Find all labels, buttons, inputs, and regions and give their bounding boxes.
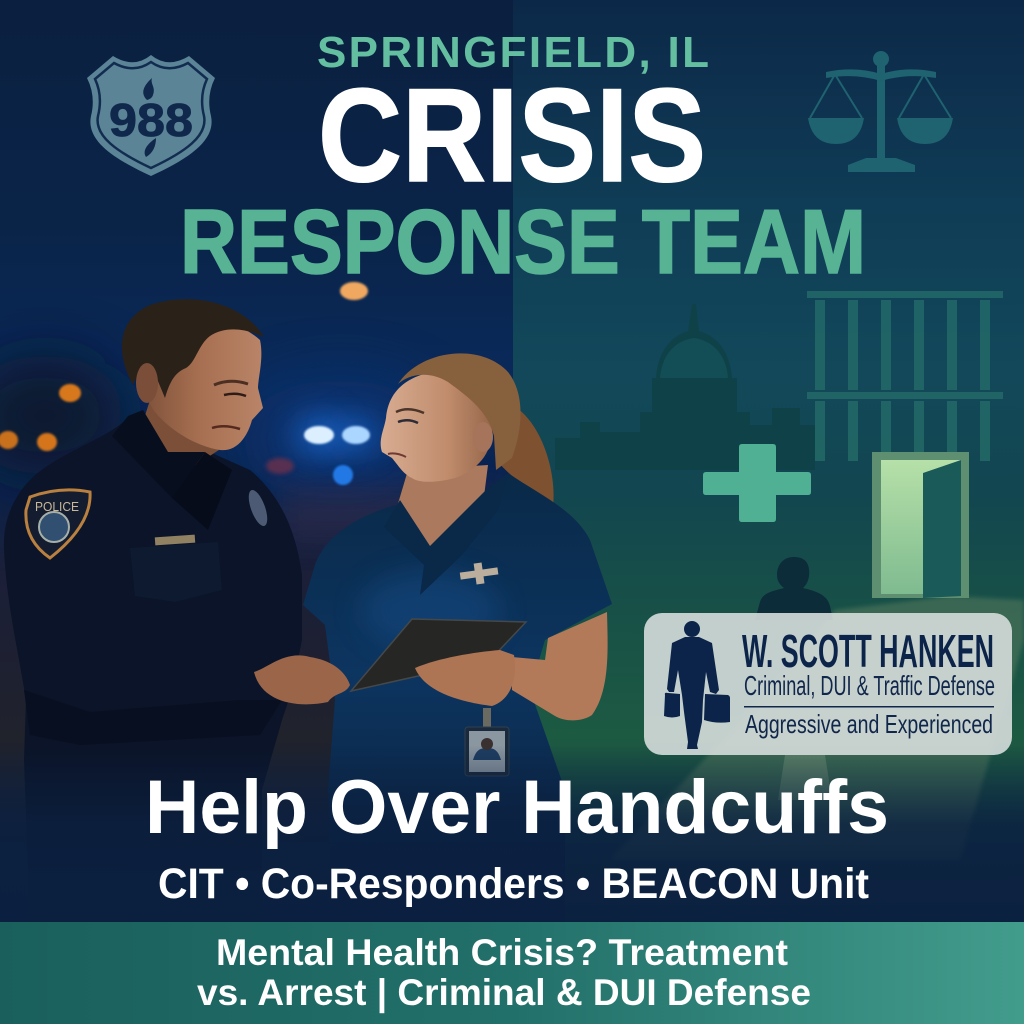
officer head (139, 314, 263, 450)
icon: 988 shield (87, 55, 215, 176)
shoulder patch: POLICE (35, 499, 79, 514)
icon: lawyer with briefcases (664, 621, 730, 749)
ponytail (498, 405, 554, 507)
officer brow, eye and mouth (212, 381, 248, 429)
officer body (4, 418, 302, 922)
face (381, 372, 492, 482)
fade under headline (0, 745, 1024, 922)
hair (398, 353, 521, 470)
shirt cross emblem (459, 560, 499, 587)
chest badge (245, 488, 271, 528)
street lights (0, 282, 380, 485)
shoulder patch (26, 490, 90, 558)
brow, eye and mouth (388, 409, 424, 457)
ear (473, 422, 493, 452)
background: right civic scene (513, 0, 1024, 1024)
bottom banner (0, 922, 1024, 1024)
bare arm (512, 612, 608, 720)
subheadline: CIT • Co-Responders • BEACON Unit (158, 860, 869, 908)
officer belt (24, 690, 282, 745)
title line: response team: RESPONSE TEAM (180, 192, 866, 293)
courthouse columns (807, 291, 1003, 461)
path of light (610, 596, 1024, 860)
icon: scales of justice (808, 51, 953, 172)
icon: medical cross (703, 444, 811, 522)
officer hair (122, 299, 264, 398)
silhouette: person walking to door (755, 557, 833, 620)
logo card (644, 613, 1012, 755)
title line: crisis: CRISIS (318, 62, 706, 210)
officer ear (136, 363, 158, 403)
banner line two: vs. Arrest | Criminal & DUI Defense (197, 972, 811, 1014)
name tag (155, 535, 195, 545)
title line: location: SPRINGFIELD, IL (317, 28, 709, 77)
icon: open door (872, 452, 969, 598)
headline: Help Over Handcuffs (145, 765, 889, 850)
background: left night street (0, 0, 513, 1024)
officer neck (142, 400, 222, 472)
title (180, 28, 866, 293)
icon: 988 shield: 988 (109, 94, 193, 146)
figure: co-responder (303, 353, 612, 922)
shirt glow (360, 570, 500, 650)
banner line one: Mental Health Crisis? Treatment (216, 932, 788, 973)
neck (397, 465, 488, 560)
shirt collar (384, 473, 508, 595)
polo shirt (303, 473, 612, 922)
capitol skyline silhouette (555, 304, 815, 470)
tablet (351, 619, 526, 691)
officer collar (112, 410, 205, 498)
figure: police officer (4, 299, 302, 922)
hands (254, 650, 515, 706)
pocket flap (130, 542, 222, 602)
ID badge (465, 708, 509, 776)
